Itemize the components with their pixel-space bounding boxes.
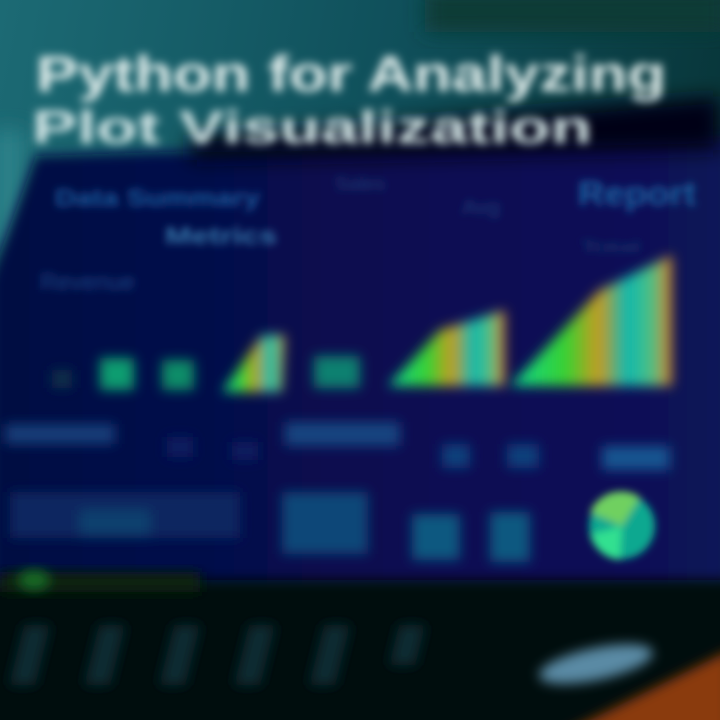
orange desk corner (560, 650, 720, 720)
header text blocks: Revenue (40, 269, 135, 296)
header text blocks: Avg (462, 197, 500, 219)
header text blocks (40, 174, 696, 296)
lower panel labels (5, 422, 670, 470)
header text blocks: Metrics (165, 223, 277, 250)
bar chart: large rising group (510, 255, 672, 386)
pie chart (589, 491, 655, 560)
bar chart: small left groups (52, 335, 360, 392)
highlight on keyboard (536, 636, 656, 692)
title: Python for Analyzing (36, 46, 666, 102)
header text blocks: Sales (335, 174, 385, 194)
header text blocks: Total (580, 239, 640, 256)
keyboard (0, 570, 720, 720)
title: Plot Visualization (32, 101, 592, 153)
title (32, 46, 666, 153)
header text blocks: Report (578, 175, 696, 213)
header text blocks: Data Summary (55, 185, 261, 212)
bar chart: middle rising group (388, 310, 505, 386)
panel: dashboard screen (0, 96, 720, 590)
lower panel tiles (10, 492, 530, 562)
